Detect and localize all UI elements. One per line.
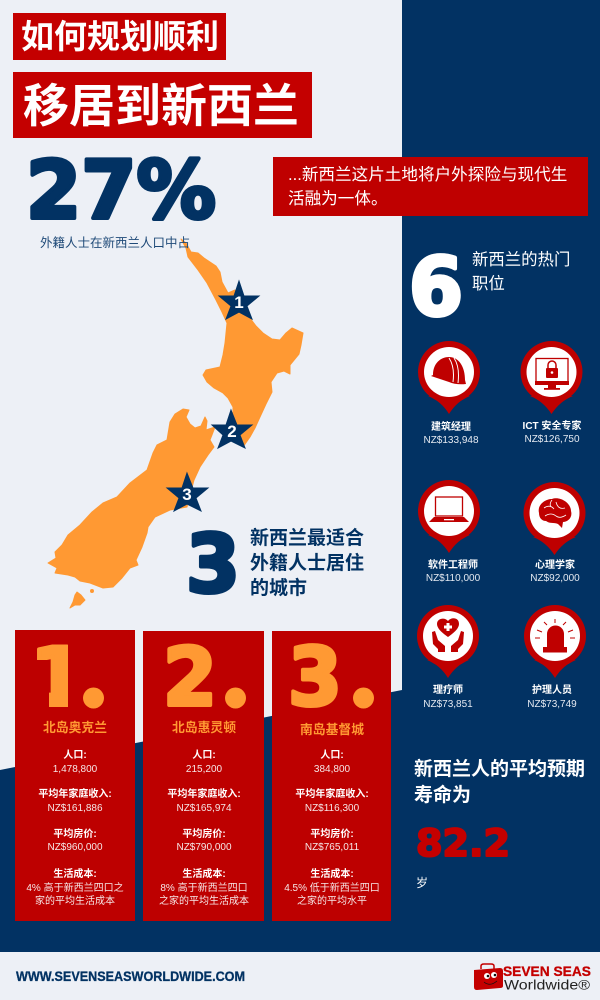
star marker 3: 3 xyxy=(182,485,192,504)
city stats: 平均年家庭收入: xyxy=(38,787,112,800)
job: construction manager: NZ$133,948 xyxy=(423,435,479,446)
statistic: life expectancy: 岁 xyxy=(416,875,428,890)
city stats: 人口: xyxy=(63,749,87,761)
title: line one: 如何规划顺利 xyxy=(21,18,219,55)
icon: laptop pin xyxy=(418,480,480,553)
icon: suitcase xyxy=(474,964,503,990)
city stats: 平均房价: xyxy=(310,827,354,840)
city stats: 平均房价: xyxy=(182,827,226,840)
city stats: 215,200 xyxy=(186,764,223,775)
city stats: 之家的平均水平 xyxy=(297,894,367,907)
city stats xyxy=(284,749,380,907)
map: north island xyxy=(181,239,303,447)
rank number 2 xyxy=(163,631,246,724)
heading: three best cities: 外籍人士居住 xyxy=(250,552,364,574)
star marker 1: 1 xyxy=(234,293,244,312)
city stats: 人口: xyxy=(192,749,216,761)
map: New Zealand xyxy=(48,239,303,608)
callout: intro text: ...新西兰这片土地将户外探险与现代生 xyxy=(288,165,567,184)
city stats: 平均年家庭收入: xyxy=(295,787,369,800)
star marker 3 xyxy=(167,473,208,511)
heading: six top jobs: 职位 xyxy=(472,275,505,293)
city stats xyxy=(26,749,124,907)
city stats: NZ$116,300 xyxy=(305,803,360,814)
map: stewart island xyxy=(70,592,85,608)
statistic: life expectancy xyxy=(414,758,585,890)
city stats: NZ$165,974 xyxy=(176,803,232,814)
job: nurse xyxy=(524,605,586,710)
city stats xyxy=(159,749,249,907)
heading: three best cities: 新西兰最适合 xyxy=(250,527,364,549)
footer: website: WWW.SEVENSEASWORLDWIDE.COM xyxy=(16,969,245,984)
job: therapist xyxy=(417,605,479,710)
star marker 2: 2 xyxy=(227,422,237,441)
rank number 3: 3 xyxy=(288,631,342,724)
statistic: 27 percent: 27% xyxy=(26,144,216,237)
city stats: 4.5% 低于新西兰四口 xyxy=(284,881,380,894)
job: ICT security specialist: ICT 安全专家 xyxy=(523,419,581,432)
city stats: 生活成本: xyxy=(182,867,226,880)
city name: 北岛惠灵顿 xyxy=(172,720,236,735)
job: software engineer: 软件工程师 xyxy=(428,558,478,571)
heading: three best cities: 3 xyxy=(186,518,240,611)
panel: Wellington xyxy=(143,631,264,921)
city stats: 平均年家庭收入: xyxy=(167,787,241,800)
rank number 1: 1 xyxy=(30,631,86,724)
heading: three best cities xyxy=(186,518,364,611)
panel: Christchurch xyxy=(272,631,391,921)
heading: three best cities: 的城市 xyxy=(250,576,307,599)
map: south island xyxy=(48,409,215,588)
footer: logo xyxy=(474,963,591,992)
city stats: 生活成本: xyxy=(310,867,354,880)
job: ICT security specialist xyxy=(520,341,582,445)
job: therapist: NZ$73,851 xyxy=(423,699,473,710)
icon: siren pin xyxy=(524,605,586,678)
footer: logo: SEVEN SEAS xyxy=(503,963,591,979)
job: psychologist: NZ$92,000 xyxy=(530,573,580,584)
icon: hard hat pin xyxy=(418,341,480,414)
heading: six top jobs: 新西兰的热门 xyxy=(472,251,570,269)
city name: 南岛基督城 xyxy=(300,722,364,737)
icon: monitor with lock pin xyxy=(520,341,582,414)
heading: six top jobs: 6 xyxy=(409,241,463,334)
callout: intro text xyxy=(273,157,588,216)
city stats: NZ$790,000 xyxy=(176,842,232,853)
icon: brain pin xyxy=(524,482,586,555)
job: psychologist xyxy=(524,482,586,584)
city stats: 之家的平均生活成本 xyxy=(159,894,249,907)
city stats: NZ$765,011 xyxy=(305,842,360,853)
city stats: NZ$960,000 xyxy=(47,842,103,853)
job: construction manager xyxy=(418,341,480,446)
heading: six top jobs xyxy=(409,241,570,334)
city name: 北岛奥克兰 xyxy=(43,720,107,735)
icon: heart in hands pin xyxy=(417,605,479,678)
star marker 1 xyxy=(219,281,259,319)
city stats: 384,800 xyxy=(314,764,351,775)
city stats: 平均房价: xyxy=(53,827,97,840)
job: psychologist: 心理学家 xyxy=(535,558,575,571)
statistic: life expectancy: 新西兰人的平均预期 xyxy=(414,758,585,780)
job: therapist: 理疗师 xyxy=(433,683,463,696)
job: software engineer: NZ$110,000 xyxy=(426,573,481,584)
star marker 2 xyxy=(212,410,252,448)
city stats: NZ$161,886 xyxy=(47,803,103,814)
job: software engineer xyxy=(418,480,481,584)
job: construction manager: 建筑经理 xyxy=(431,420,471,433)
panel: Auckland xyxy=(15,630,135,921)
city stats: 1,478,800 xyxy=(53,764,98,775)
statistic: 27 percent: 外籍人士在新西兰人口中占 xyxy=(40,235,190,250)
footer: logo: Worldwide® xyxy=(504,976,591,992)
title: line two: 移居到新西兰 xyxy=(23,80,299,132)
job: ICT security specialist: NZ$126,750 xyxy=(524,434,580,445)
job: nurse: 护理人员 xyxy=(532,683,572,696)
city stats: 家的平均生活成本 xyxy=(35,894,115,907)
rank number 3 xyxy=(288,631,374,724)
city stats: 生活成本: xyxy=(53,867,97,880)
statistic: life expectancy: 寿命为 xyxy=(414,783,471,806)
statistic: life expectancy: 82.2 xyxy=(416,822,510,865)
job: nurse: NZ$73,749 xyxy=(527,699,577,710)
callout: intro text: 活融为一体。 xyxy=(288,189,388,208)
rank number 1 xyxy=(37,644,104,708)
city stats: 人口: xyxy=(320,749,344,761)
rank number 2: 2 xyxy=(163,631,217,724)
city stats: 8% 高于新西兰四口 xyxy=(160,881,248,894)
city stats: 4% 高于新西兰四口之 xyxy=(26,881,124,894)
